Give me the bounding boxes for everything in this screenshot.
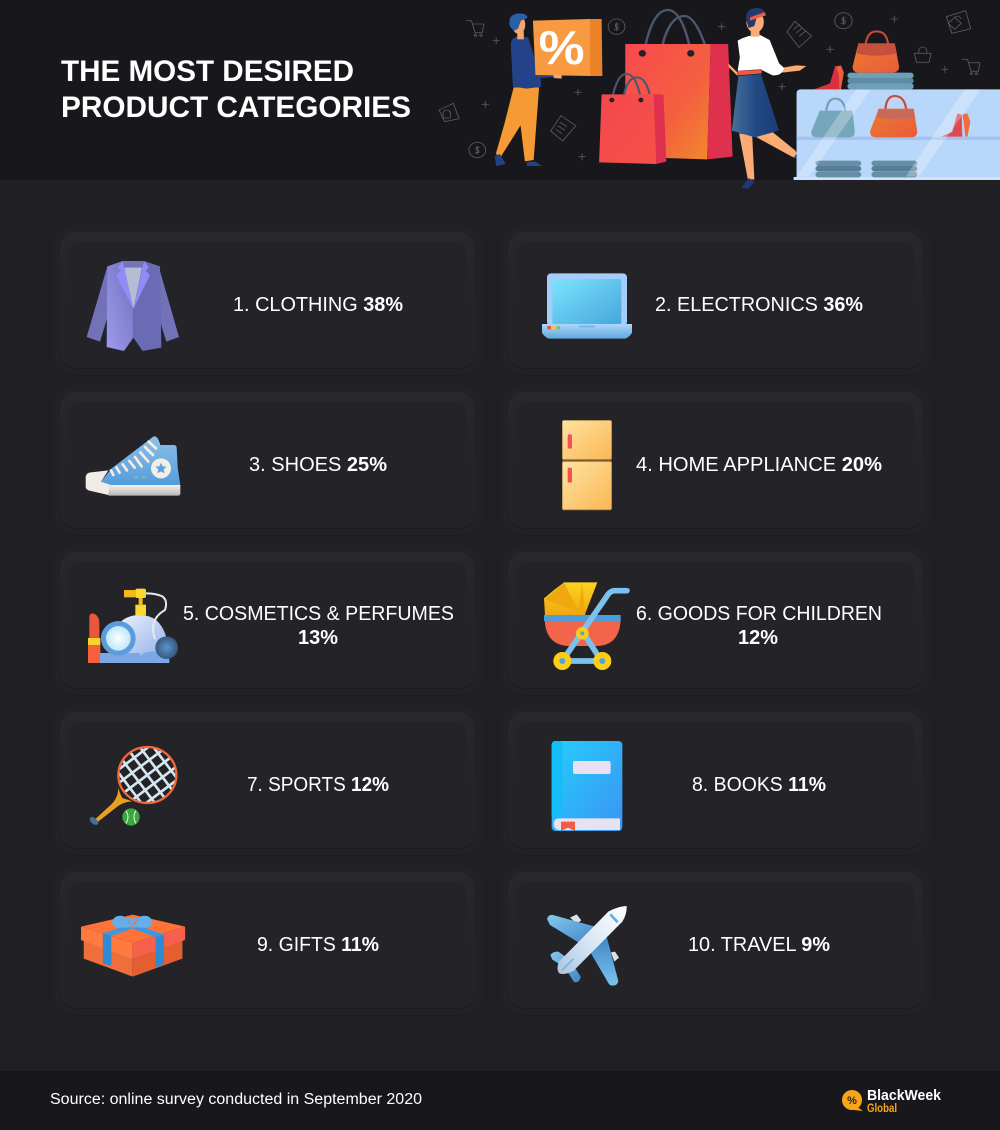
card 10: travel [501,866,930,1014]
logo: BlackWeek Global: % [847,1095,857,1107]
label: cosmetics and perfumes: 5. COSMETICS & PERFUMES [183,603,454,625]
icon: laptop [542,273,632,339]
icon: tennis racket and ball [90,746,178,826]
card 5: cosmetics and perfumes [53,546,482,694]
header band [0,0,1000,180]
title: PRODUCT CATEGORIES [61,91,411,124]
logo: BlackWeek Global [842,1087,942,1115]
icon: blazer [87,261,179,351]
logo: BlackWeek Global: Global [867,1103,897,1115]
icon: gift box [81,915,185,977]
large red shopping bag [625,10,733,159]
card 1: clothing [53,226,482,374]
icon: blue book [552,741,622,831]
label: cosmetics and perfumes: 13% [298,627,338,649]
label: goods for children: 12% [738,627,778,649]
card 7: sports [90,746,388,826]
icon: sneaker [86,436,180,496]
card 6: goods for children [501,546,930,694]
label: goods for children: 6. GOODS FOR CHILDREN [636,603,882,625]
header illustration: shoppers and shop display [439,8,1000,189]
logo: BlackWeek Global: BlackWeek [867,1087,942,1104]
card 4: home appliance [501,386,930,534]
icon: airplane [547,906,627,986]
card 8: books [501,706,930,854]
footer band [0,1071,1000,1130]
icon: perfume and lipstick [88,589,178,663]
background line icons [439,11,980,160]
card 9: gifts [53,866,482,1014]
label: sports: 7. SPORTS 12% [247,774,389,796]
card 2: electronics [501,226,930,374]
shelf folded stacks [815,161,861,166]
source note: Source: online survey conducted in September 2020 [50,1091,422,1108]
card 3: shoes [53,386,482,534]
label: gifts: 9. GIFTS 11% [257,934,379,956]
man carrying percent box [495,13,602,166]
top display: handbag, heels and folded stack [814,31,914,89]
label: home appliance: 4. HOME APPLIANCE 20% [636,454,882,476]
label: electronics: 2. ELECTRONICS 36% [655,294,863,316]
icon: baby stroller [544,582,627,670]
small red shopping bag [599,74,666,164]
label: clothing: 1. CLOTHING 38% [233,294,403,316]
shelf bags [826,99,845,111]
title: THE MOST DESIRED [61,55,354,88]
label: travel: 10. TRAVEL 9% [688,934,830,956]
woman with skirt [728,8,807,189]
label: shoes: 3. SHOES 25% [249,454,387,476]
glass shop display [794,89,1000,180]
label: books: 8. BOOKS 11% [692,774,826,796]
icon: fridge [562,420,612,510]
percent sign: % [539,22,585,75]
